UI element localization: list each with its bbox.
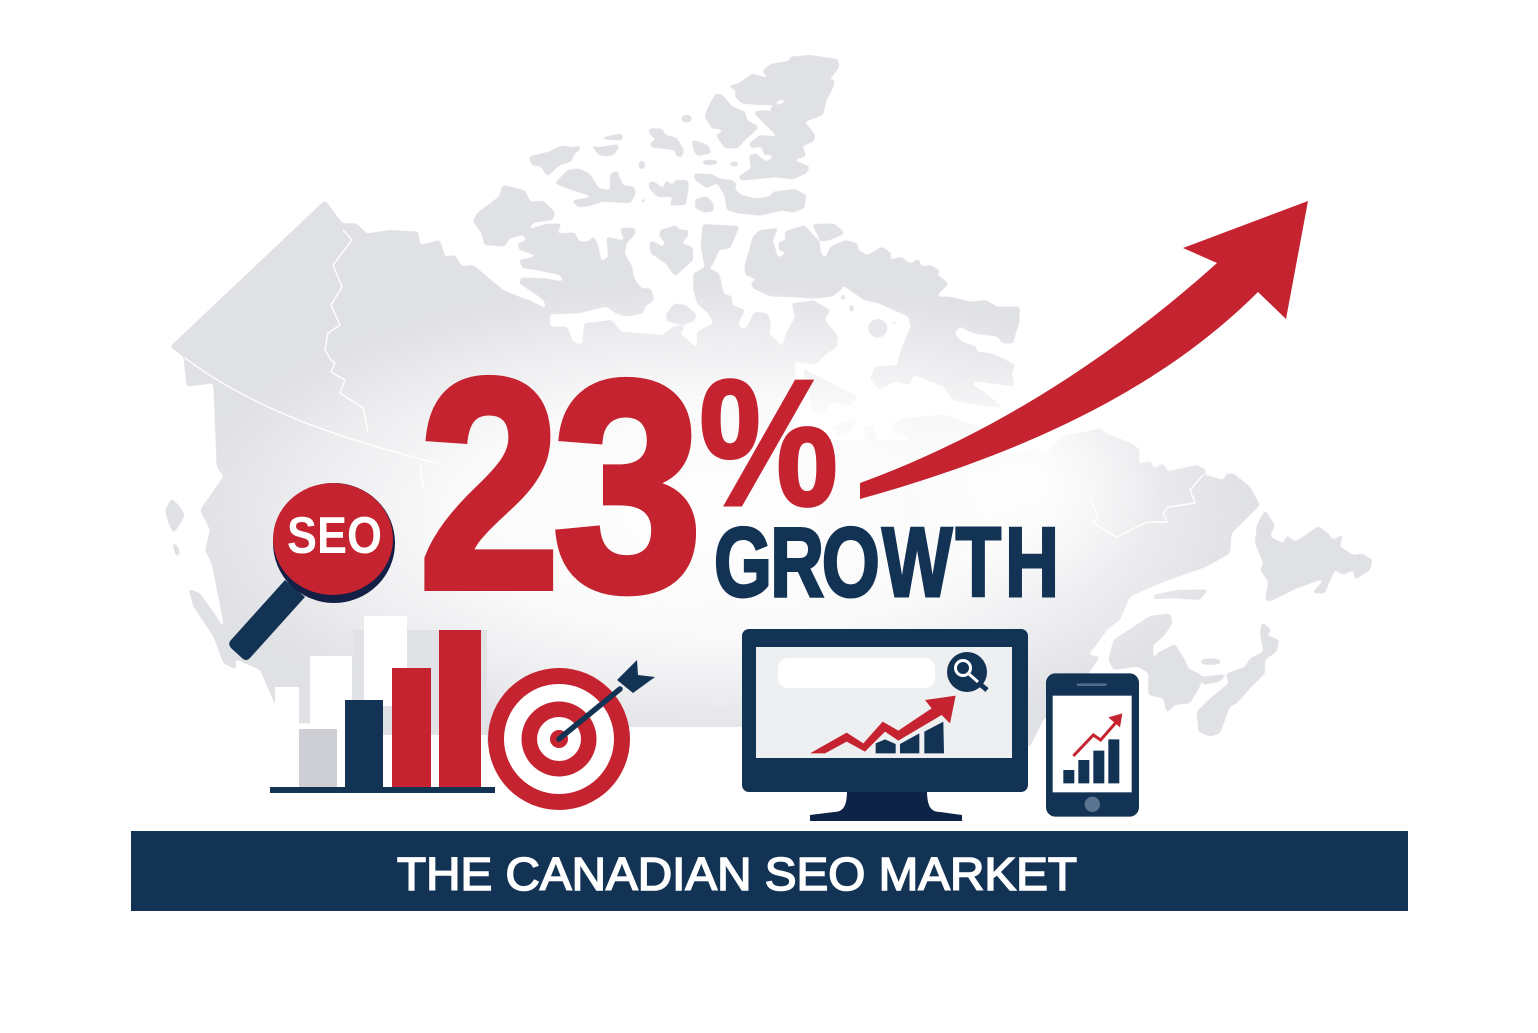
icon: SEO magnifying glass (229, 483, 395, 660)
background map of Canada (165, 55, 1373, 750)
icon: SEO magnifying glass: SEO (287, 507, 382, 565)
growth arrow (860, 201, 1308, 499)
screen chart (810, 696, 956, 753)
title banner (131, 831, 1408, 911)
headline: 23%: % (699, 342, 838, 543)
headline: 23%: 3 (553, 320, 702, 653)
icon: desktop monitor with rising chart (742, 629, 1028, 821)
icon: target with dart (488, 660, 655, 810)
search icon (947, 652, 987, 692)
headline: 23%: 2 (419, 318, 560, 651)
title banner: THE CANADIAN SEO MARKET (397, 848, 1077, 900)
headline: GROWTH: GROWTH (714, 508, 1059, 617)
headline: 23% (419, 318, 838, 653)
icon: smartphone with chart (1046, 673, 1139, 817)
icon: bar chart (270, 616, 495, 793)
search bar (778, 658, 935, 688)
